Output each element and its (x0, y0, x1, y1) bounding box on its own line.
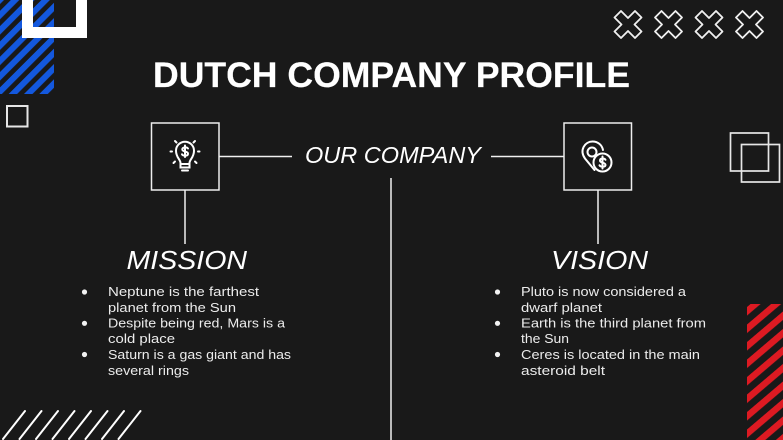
red striped decoration (747, 304, 783, 440)
mission bullet list: cold place (108, 331, 175, 346)
overlapping squares decoration (730, 133, 780, 182)
vision icon box (564, 123, 632, 190)
small outlined square (7, 106, 28, 126)
vision bullet list (495, 284, 706, 378)
vision bullet list: dwarf planet (521, 300, 602, 315)
mission bullet list: Saturn is a gas giant and has (108, 347, 292, 362)
x mark 3 (696, 11, 722, 38)
icon: light bulb with dollar (170, 141, 200, 170)
heading: vision: VISION (551, 247, 649, 275)
vision bullet list: Pluto is now considered a (521, 284, 687, 299)
blue striped decoration (0, 0, 54, 94)
decorative x marks (614, 11, 763, 38)
vision bullet list: asteroid belt (521, 363, 605, 378)
mission bullet list: several rings (108, 363, 190, 378)
mission icon box (152, 123, 219, 190)
connector lines (185, 156, 598, 440)
heading: our company: OUR COMPANY (305, 142, 483, 168)
x mark 4 (736, 11, 763, 38)
x mark 1 (614, 11, 642, 38)
white bracket square (22, 0, 87, 38)
vision bullet list: Ceres is located in the main (521, 347, 700, 362)
mission bullet list: Neptune is the farthest (108, 284, 259, 299)
mission bullet list: planet from the Sun (108, 300, 236, 315)
vision bullet list: the Sun (521, 331, 569, 346)
heading: mission: MISSION (126, 247, 248, 275)
vision bullet list: Earth is the third planet from (521, 316, 706, 330)
x mark 2 (655, 11, 682, 38)
white diagonal stripes (3, 411, 140, 439)
mission bullet list (82, 284, 292, 378)
icon: location pin with dollar (583, 142, 612, 172)
title: DUTCH COMPANY PROFILE (153, 56, 630, 95)
mission bullet list: Despite being red, Mars is a (108, 316, 286, 330)
